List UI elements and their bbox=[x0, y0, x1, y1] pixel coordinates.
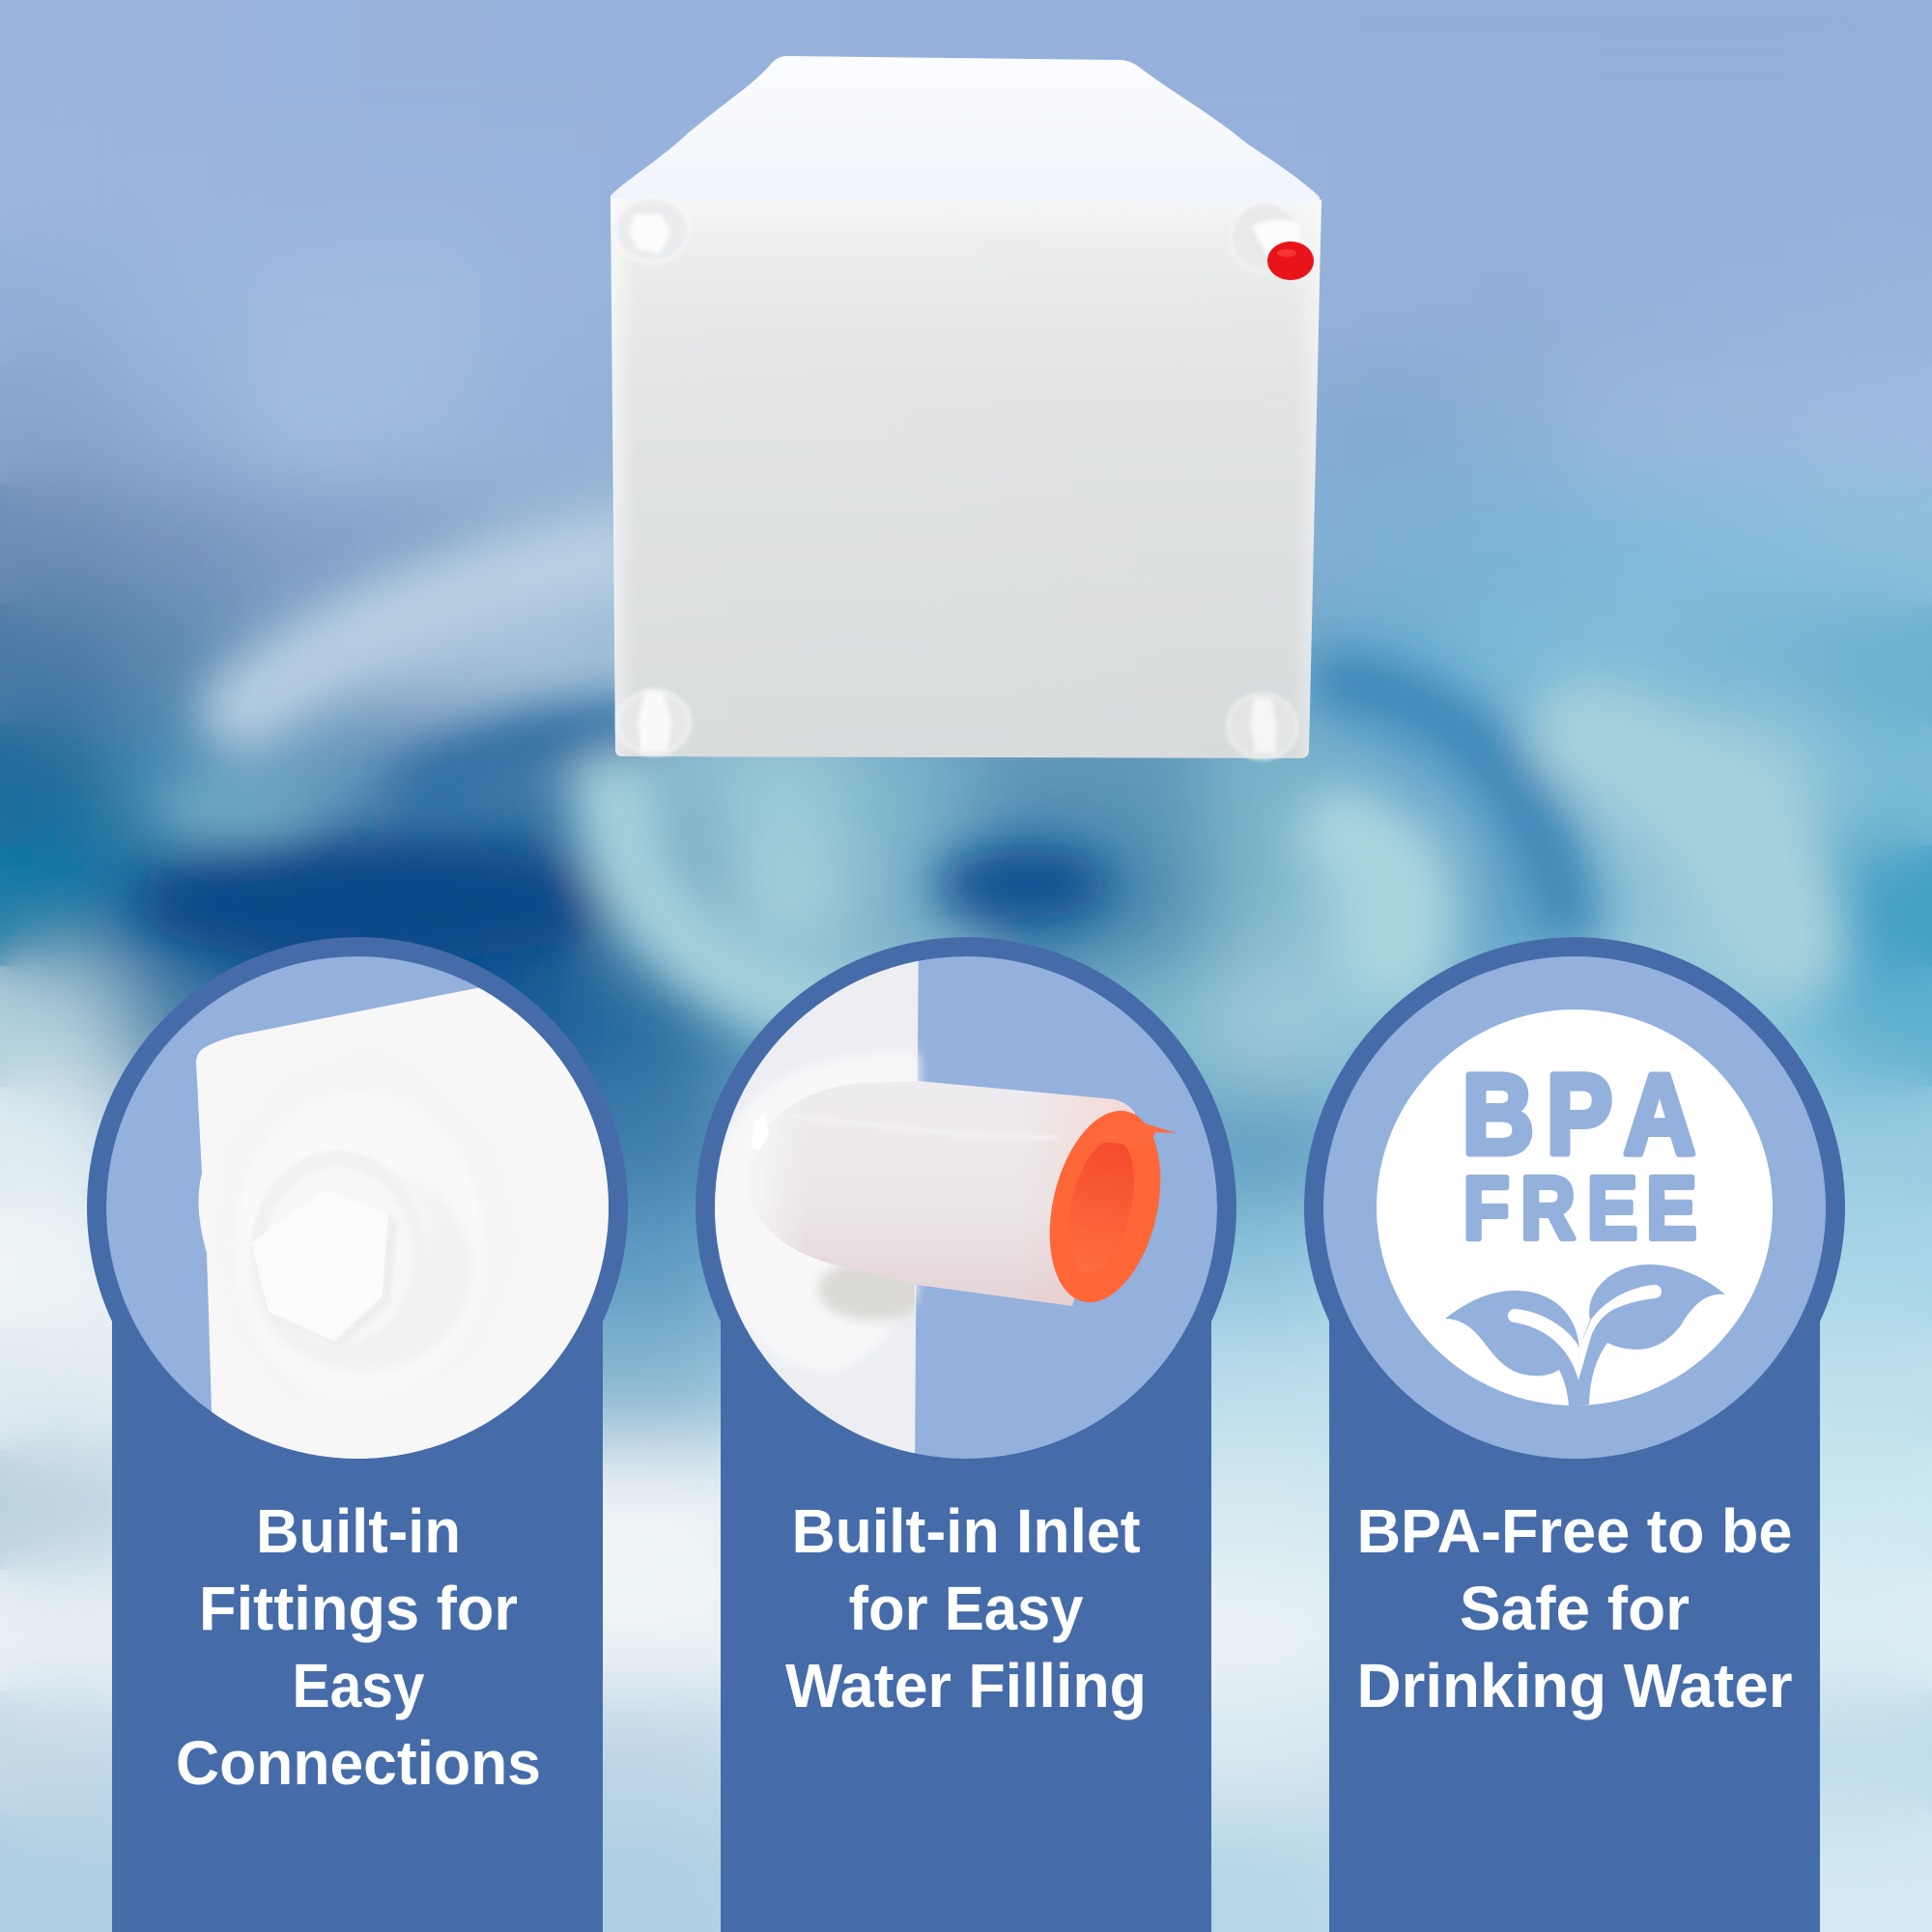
water tank product photo bbox=[611, 56, 1321, 758]
fitting: top left bbox=[615, 198, 689, 262]
caption: Drinking Water bbox=[1356, 1651, 1793, 1720]
caption: Water Filling bbox=[785, 1651, 1147, 1720]
caption: Built-in bbox=[256, 1496, 461, 1566]
BPA free badge bbox=[1377, 1009, 1773, 1406]
caption bbox=[176, 1496, 541, 1798]
caption: Easy bbox=[292, 1651, 425, 1720]
caption: Built-in Inlet bbox=[792, 1496, 1140, 1566]
panel: BPA free bbox=[1304, 937, 1845, 1932]
badge text: BPA bbox=[1463, 1051, 1695, 1179]
panel shape bbox=[1304, 937, 1845, 1932]
icon: plant sprout bbox=[1445, 1264, 1725, 1406]
caption: Fittings for bbox=[199, 1574, 518, 1643]
caption: Safe for bbox=[1460, 1574, 1690, 1643]
panel shape bbox=[87, 937, 628, 1932]
fitting: top right with red cap bbox=[1231, 203, 1314, 280]
tank front face bbox=[611, 194, 1321, 758]
circle photo: fitting close-up bbox=[106, 956, 609, 1459]
panel shape bbox=[696, 937, 1236, 1932]
badge text: FREE bbox=[1463, 1159, 1696, 1258]
orange cap bbox=[1049, 1111, 1177, 1302]
caption bbox=[1356, 1496, 1793, 1720]
panel: built-in inlet bbox=[676, 918, 1236, 1932]
caption: BPA-Free to be bbox=[1356, 1496, 1793, 1566]
light ring bbox=[1323, 956, 1826, 1459]
panel: built-in fittings bbox=[87, 937, 676, 1932]
circle photo: inlet tube close-up bbox=[715, 956, 1217, 1459]
caption: Connections bbox=[176, 1728, 541, 1798]
tank top face bbox=[611, 56, 1320, 207]
fitting: bottom left bbox=[618, 691, 690, 754]
caption bbox=[785, 1496, 1147, 1720]
badge text bbox=[1463, 1051, 1696, 1258]
caption: for Easy bbox=[848, 1574, 1084, 1643]
fitting: bottom right bbox=[1228, 695, 1297, 758]
swirl bands bbox=[135, 555, 1787, 1014]
